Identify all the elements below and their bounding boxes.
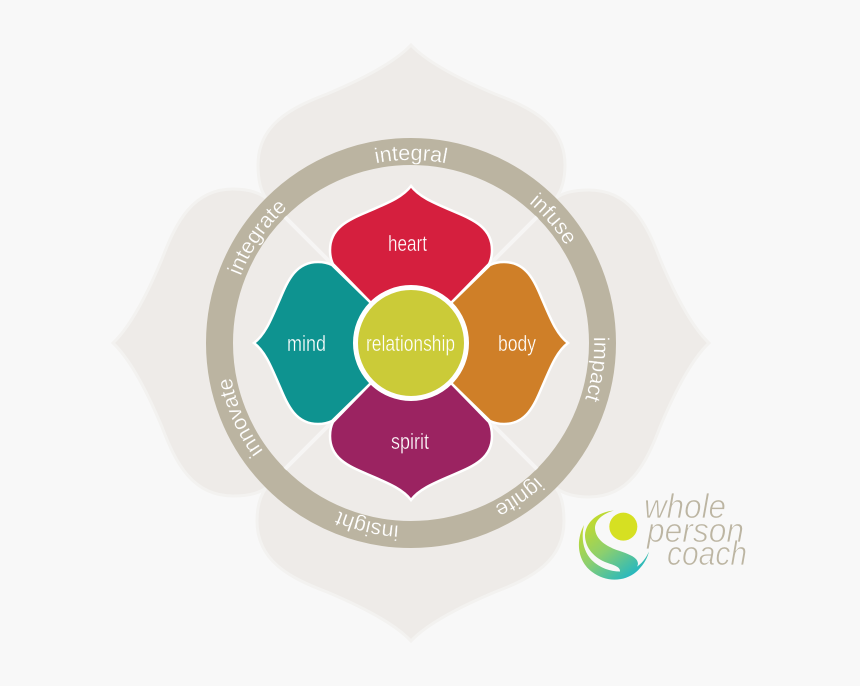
text: mind: mind — [287, 331, 326, 356]
diagonal dividers — [285, 217, 537, 469]
text: coach: coach — [667, 535, 747, 573]
center circle: relationship — [356, 288, 466, 398]
label: ignite: ignite — [496, 478, 546, 514]
logo: whole person coach — [579, 488, 747, 580]
text: spirit: spirit — [391, 429, 429, 454]
outer lotus petals — [113, 45, 709, 641]
label: infuse: infuse — [530, 192, 574, 244]
text: heart: heart — [388, 231, 427, 256]
ring labels — [221, 146, 644, 580]
petal: heart — [330, 186, 492, 303]
text: body: body — [498, 331, 536, 356]
text: relationship: relationship — [366, 331, 455, 356]
petal: body — [451, 262, 568, 424]
label: insight: insight — [335, 511, 398, 541]
label: integral: integral — [374, 146, 448, 164]
text: whole: whole — [644, 488, 726, 526]
label: impact: impact — [585, 338, 610, 402]
label: innovate: innovate — [221, 379, 262, 459]
text: person: person — [646, 512, 744, 550]
petal: mind — [254, 262, 371, 424]
icon: logo swirl — [579, 511, 649, 580]
label: integrate: integrate — [226, 202, 286, 275]
petal: spirit — [330, 383, 492, 500]
ring band — [220, 152, 602, 534]
